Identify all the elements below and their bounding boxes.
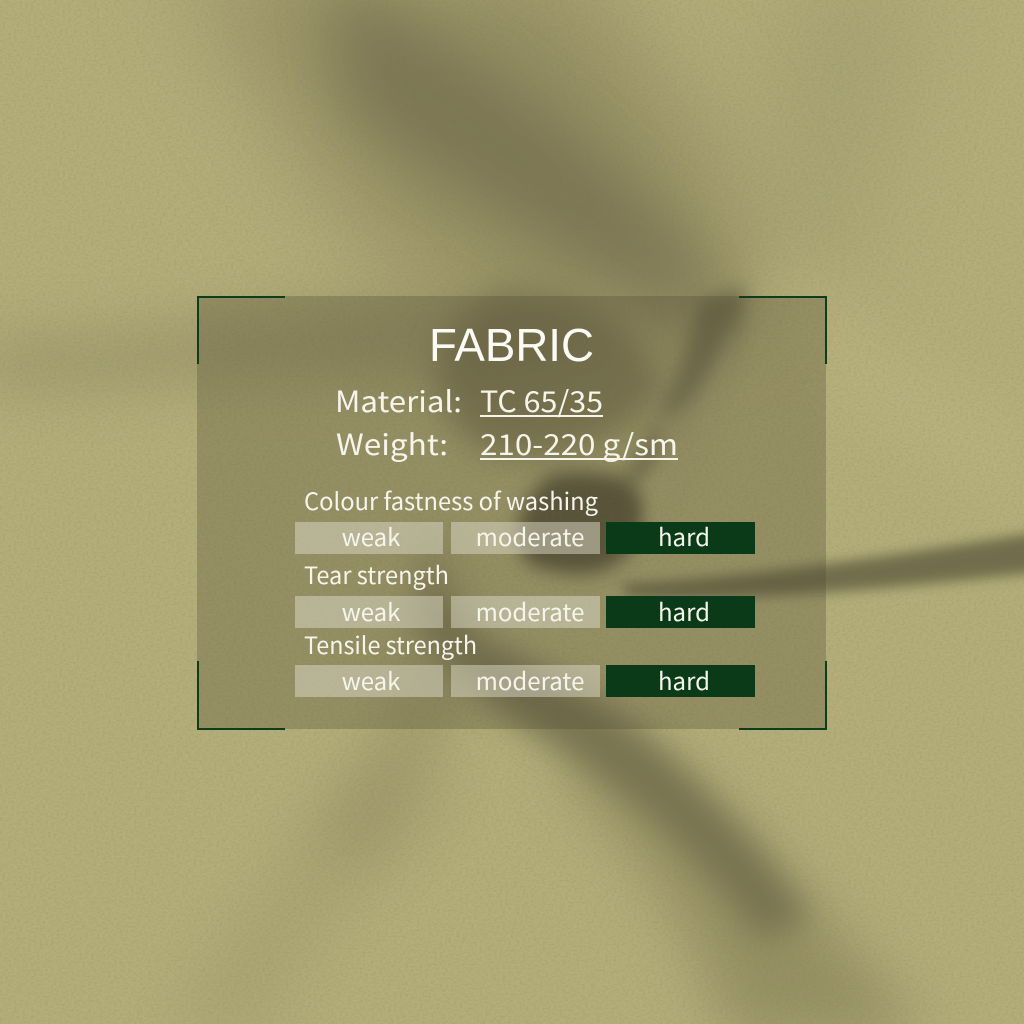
weight row [336, 422, 678, 464]
panel: translucent fabric spec card [197, 296, 826, 729]
corner bracket: top right [739, 297, 826, 364]
rating group: tear strength: Tear strength [304, 556, 449, 591]
material row: TC 65/35 [480, 379, 603, 421]
corner bracket: bottom left [198, 661, 285, 729]
rating group: colour fastness of washing: hard [658, 518, 710, 553]
corner bracket: bottom right [739, 661, 826, 729]
rating group: tensile strength: Tensile strength [304, 626, 477, 661]
rating group: tensile strength: moderate [476, 662, 584, 697]
rating group: tear strength: moderate [476, 593, 584, 628]
corner bracket: top left [198, 297, 285, 364]
rating group: tensile strength [295, 626, 755, 697]
rating group: tensile strength: hard [658, 662, 710, 697]
weight row: 210-220 g/sm [480, 422, 678, 464]
weight row: Weight: [336, 422, 448, 464]
rating group: colour fastness of washing [295, 482, 755, 554]
rating group: tear strength: weak [342, 593, 400, 628]
rating group: colour fastness of washing: Colour fastness of washing [304, 482, 598, 517]
rating group: colour fastness of washing: weak [342, 518, 400, 553]
material row [335, 379, 603, 421]
rating group: colour fastness of washing: moderate [476, 518, 584, 553]
title: FABRIC [429, 319, 594, 371]
rating group: tensile strength: weak [342, 662, 400, 697]
rating group: tear strength [295, 556, 755, 628]
rating group: tear strength: hard [658, 593, 710, 628]
material row: Material: [335, 379, 462, 421]
